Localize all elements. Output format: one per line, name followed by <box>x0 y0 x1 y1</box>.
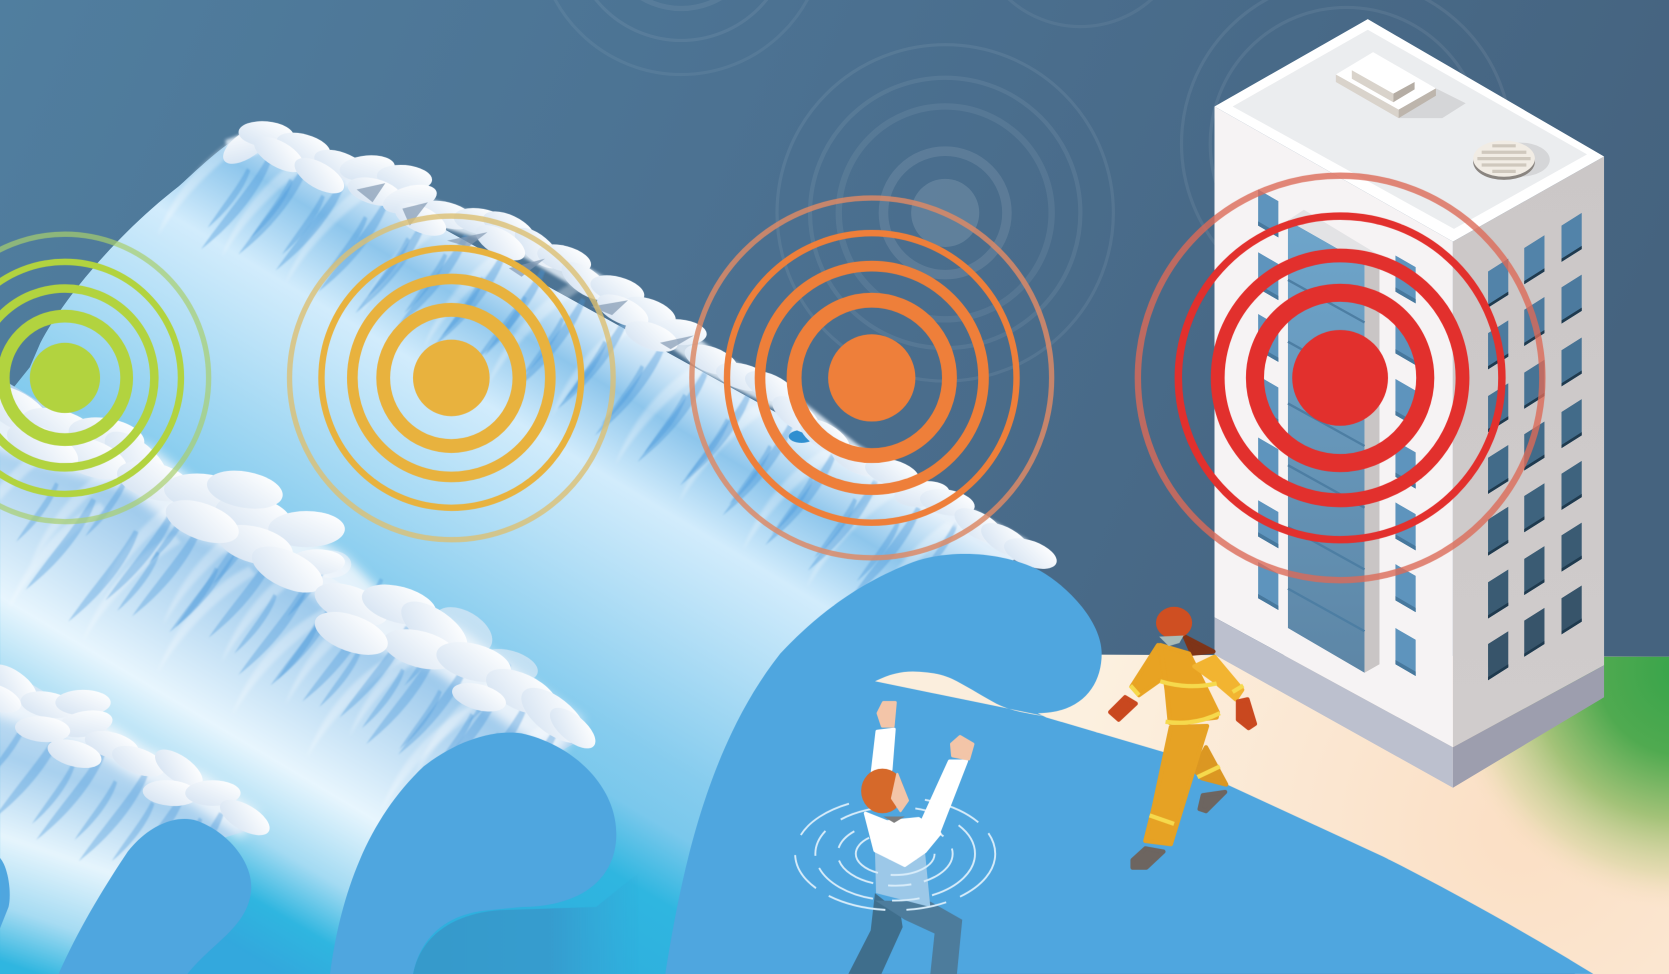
alert rings: red <box>1138 176 1542 580</box>
sand sliver in wave curl <box>875 671 1046 716</box>
right wall windows <box>1488 213 1582 680</box>
middle wave white streaks <box>0 439 564 822</box>
person submerged torso <box>875 851 930 907</box>
person hair <box>861 769 904 813</box>
back wave foam crest <box>217 118 1061 575</box>
rooftop vent <box>1473 141 1550 180</box>
front wave surface <box>0 665 266 974</box>
person hands <box>878 703 973 759</box>
building wall left <box>1214 106 1453 747</box>
middle wave translucent puffs <box>309 550 541 687</box>
alert rings: green <box>0 234 209 522</box>
faint background ripple rings <box>538 0 1511 381</box>
back wave feathers <box>158 130 1022 620</box>
front wave feathers <box>0 722 224 904</box>
firefighter back leg <box>1194 747 1226 785</box>
firefighter front boot <box>1133 848 1163 868</box>
person collar <box>883 816 905 823</box>
front wave foam crest <box>0 657 275 842</box>
firefighter front leg <box>1145 726 1207 844</box>
back wave teal gap <box>789 430 814 443</box>
person legs <box>848 893 962 974</box>
firefighter helmet <box>1156 607 1192 639</box>
person shirt <box>865 813 940 865</box>
building <box>1214 19 1604 788</box>
front wave foam mass <box>0 697 250 825</box>
building base <box>1214 617 1604 788</box>
rooftop unit <box>1336 52 1466 118</box>
firefighter <box>1110 607 1255 868</box>
grass corner <box>1469 657 1669 915</box>
back wave blue streaks <box>201 158 958 598</box>
firefighter right arm <box>1194 657 1242 699</box>
firefighter gloves <box>1110 697 1255 728</box>
firefighter back boot <box>1200 792 1225 811</box>
middle wave foam crest <box>0 375 602 756</box>
shaded foam slivers <box>357 183 694 349</box>
left wall windows <box>1258 189 1416 676</box>
alert rings: orange <box>692 198 1052 558</box>
middle wave feathers <box>0 439 564 822</box>
back wave surface <box>0 127 1022 974</box>
back wave foam mass <box>229 138 1022 550</box>
back wave water body <box>665 554 1593 974</box>
firefighter left arm <box>1131 645 1164 695</box>
far left wave body <box>0 858 10 928</box>
firefighter torso <box>1160 645 1218 723</box>
central window strip <box>1288 210 1379 673</box>
middle wave foam mass <box>0 420 569 740</box>
middle wave blue streaks <box>16 477 559 819</box>
person face <box>892 774 908 811</box>
middle wave water body <box>330 733 616 974</box>
person raised arms <box>872 729 966 832</box>
building wall right <box>1453 156 1604 747</box>
sand beach <box>958 655 1669 974</box>
alert rings: yellow <box>290 216 613 540</box>
back wave white streaks <box>158 130 969 620</box>
building roof <box>1214 19 1604 242</box>
front wave water body <box>59 819 251 974</box>
middle wave surface <box>0 378 591 974</box>
firefighter mask <box>1159 635 1184 646</box>
deep water shadow <box>413 830 692 974</box>
firefighter hair <box>1185 637 1213 654</box>
drowning person <box>795 703 995 974</box>
water ripples <box>795 797 995 910</box>
firefighter reflective stripes <box>1130 681 1243 824</box>
